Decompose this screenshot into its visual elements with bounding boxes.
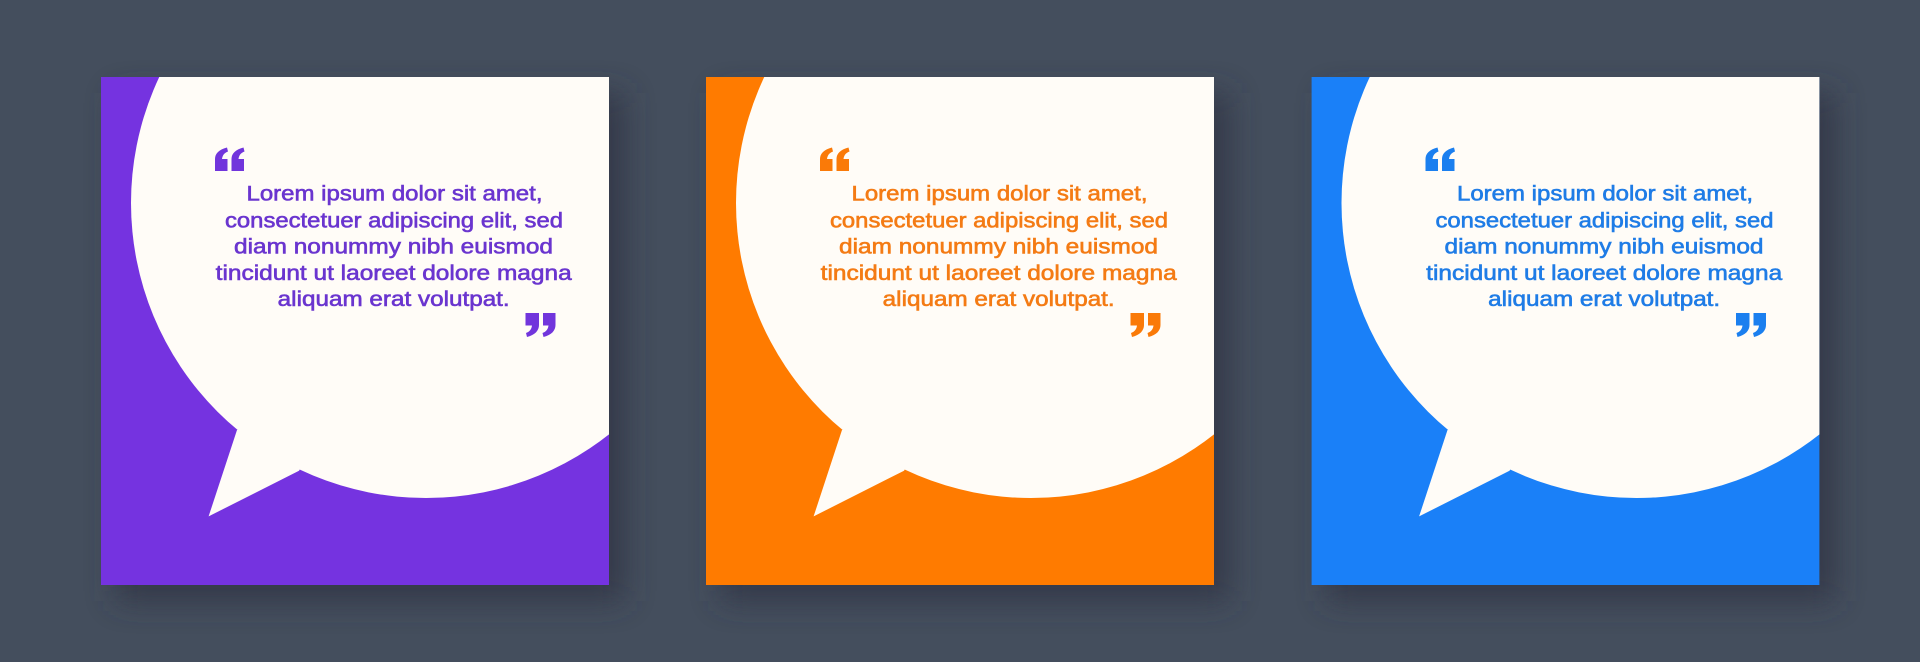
quote text: aliquam erat volutpat. [883,288,1115,311]
quote text: tincidunt ut laoreet dolore magna [216,262,572,285]
quote text: tincidunt ut laoreet dolore magna [821,262,1177,285]
quote text [821,183,1177,311]
quote text: consectetuer adipiscing elit, sed [830,209,1168,232]
speech bubble [736,77,1214,516]
quote text: consectetuer adipiscing elit, sed [1436,209,1774,232]
quote text: diam nonummy nibh euismod [234,236,553,258]
infographic canvas [101,77,1840,607]
icon: opening quote [215,148,244,171]
speech bubble [1342,77,1820,516]
panel: orange quote card [706,77,1234,607]
quote text: Lorem ipsum dolor sit amet, [1457,183,1753,206]
icon: opening quote [820,148,850,171]
quote text [216,183,572,311]
icon: closing quote [1130,313,1160,337]
quote text: Lorem ipsum dolor sit amet, [246,183,542,206]
quote text: aliquam erat volutpat. [278,288,510,311]
quote text: aliquam erat volutpat. [1488,288,1720,311]
icon: closing quote [526,313,556,337]
quote text: diam nonummy nibh euismod [839,236,1158,258]
quote text: consectetuer adipiscing elit, sed [225,209,563,232]
quote text [1426,183,1783,311]
icon: opening quote [1426,148,1455,171]
icon: closing quote [1736,313,1766,337]
panel: purple quote card [101,77,629,607]
quote text: diam nonummy nibh euismod [1444,236,1764,258]
quote text: tincidunt ut laoreet dolore magna [1426,262,1783,285]
quote text: Lorem ipsum dolor sit amet, [852,183,1148,206]
speech bubble [131,77,609,516]
panel: blue quote card [1312,77,1840,607]
